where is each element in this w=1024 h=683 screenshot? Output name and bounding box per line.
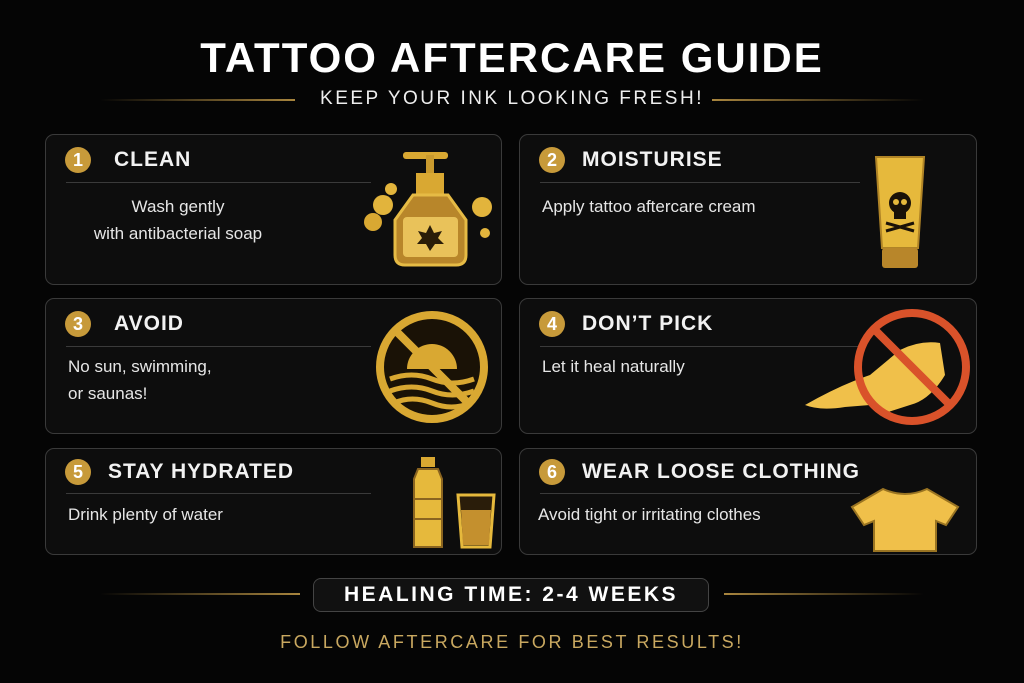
heading moisturise: MOISTURISE xyxy=(582,148,723,171)
text clean: with antibacterial soap xyxy=(94,224,262,243)
number 3: 3 xyxy=(73,314,83,334)
icon: no picking hand xyxy=(805,309,970,425)
icon: cream tube xyxy=(874,156,926,268)
number 1: 1 xyxy=(73,150,83,170)
icon: no sun/swim xyxy=(376,311,488,423)
text clean: Wash gently xyxy=(132,197,224,216)
number 6 xyxy=(539,459,565,485)
text moisturise: Apply tattoo aftercare cream xyxy=(542,197,756,216)
number 2 xyxy=(539,147,565,173)
number 4: 4 xyxy=(547,314,557,334)
text avoid: No sun, swimming, xyxy=(68,357,212,376)
icon: bottle and glass xyxy=(413,457,496,548)
text don't pick: Let it heal naturally xyxy=(542,357,685,376)
heading loose clothing: WEAR LOOSE CLOTHING xyxy=(582,460,860,483)
icon: soap bottle xyxy=(364,152,492,266)
number 4 xyxy=(539,311,565,337)
text clothing: Avoid tight or irritating clothes xyxy=(538,505,761,524)
panel: clean xyxy=(45,134,502,285)
heading clean: CLEAN xyxy=(114,148,191,171)
heading stay hydrated: STAY HYDRATED xyxy=(108,460,294,483)
text avoid xyxy=(68,357,212,403)
panel: moisturise xyxy=(519,134,977,285)
footer text: FOLLOW AFTERCARE FOR BEST RESULTS! xyxy=(280,632,744,652)
number 2: 2 xyxy=(547,150,557,170)
panel: wear loose clothing xyxy=(519,448,977,555)
panel: avoid xyxy=(45,298,502,434)
panel: don't pick xyxy=(519,298,977,434)
icon: t-shirt xyxy=(850,488,960,552)
text hydrated: Drink plenty of water xyxy=(68,505,223,524)
number 5: 5 xyxy=(73,462,83,482)
heading don't pick: DON’T PICK xyxy=(582,312,713,335)
subtitle: KEEP YOUR INK LOOKING FRESH! xyxy=(320,88,704,109)
title: TATTOO AFTERCARE GUIDE xyxy=(200,34,824,81)
number 3 xyxy=(65,311,91,337)
heading avoid: AVOID xyxy=(114,312,184,335)
text clean xyxy=(94,197,262,243)
number 6: 6 xyxy=(547,462,557,482)
number 1 xyxy=(65,147,91,173)
panel: stay hydrated xyxy=(45,448,502,555)
healing time banner: HEALING TIME: 2-4 WEEKS xyxy=(344,583,678,606)
text avoid: or saunas! xyxy=(68,384,147,403)
number 5 xyxy=(65,459,91,485)
